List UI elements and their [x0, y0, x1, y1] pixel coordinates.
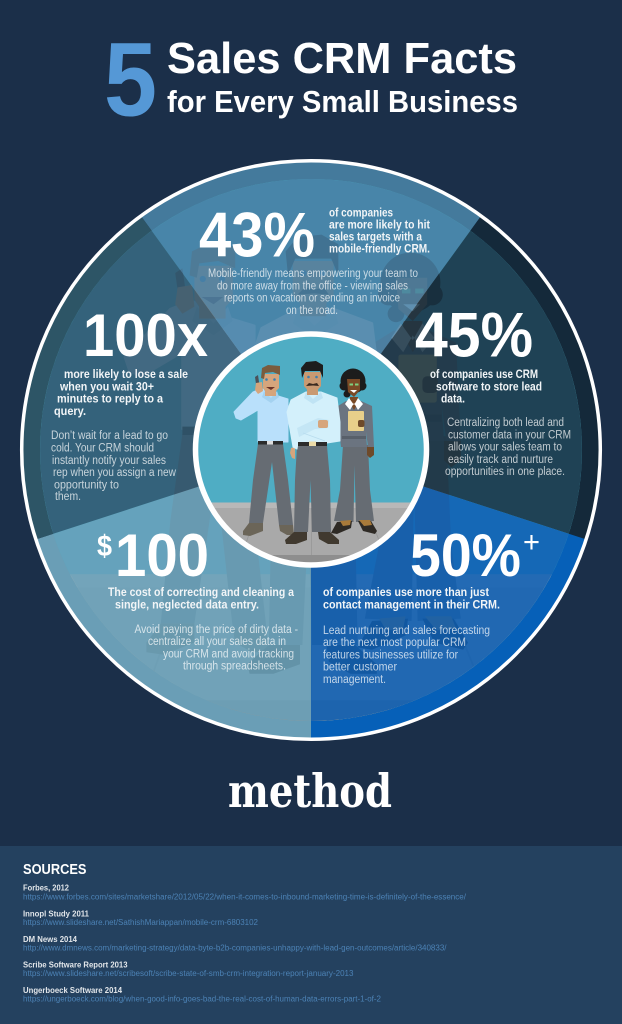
fact: 50%+	[323, 522, 540, 686]
43% headline	[329, 208, 430, 256]
$100 description: your CRM and avoid tracking	[163, 648, 294, 660]
source: DM News: http://www.dmnews.com/marketing-strategy/data-byte-b2b-companies-unhappy-with-lead-gen-outcomes/article/340833/	[23, 944, 447, 952]
43% headline: are more likely to hit	[329, 220, 430, 232]
43% headline: mobile-friendly CRM.	[329, 244, 430, 256]
45% headline: of companies use CRM	[430, 369, 538, 381]
100x description: rep when you assign a new	[53, 467, 177, 479]
$100 headline	[108, 587, 295, 612]
pie chart: five facts	[20, 159, 602, 741]
stat 50%+: 50%	[410, 522, 521, 589]
100x headline: more likely to lose a sale	[64, 369, 188, 381]
outer band sectors	[21, 160, 601, 740]
wedge colour overlays	[40, 179, 582, 721]
45% headline	[430, 369, 542, 406]
source: Ungerboeck: https://ungerboeck.com/blog/when-good-info-goes-bad-the-real-cost-of-human-data-errors-part-1-of-2	[23, 995, 382, 1004]
panel: sources	[0, 846, 622, 1024]
stat $100: $	[97, 530, 112, 563]
big numeral 5: 5	[104, 22, 157, 138]
fact: 100x	[51, 302, 208, 503]
title line 1: Sales CRM Facts	[167, 34, 517, 83]
source: Scribe: Scribe Software Report 2013	[23, 960, 128, 970]
$100 description: centralize all your sales data in	[148, 636, 286, 648]
source: Innopl: Innopl Study 2011	[23, 908, 89, 918]
45% description: customer data in your CRM	[448, 430, 571, 442]
100x description: opportunity to	[54, 480, 119, 492]
45% description: easily track and nurture	[448, 454, 553, 466]
title	[104, 22, 518, 138]
43% headline: of companies	[329, 208, 393, 220]
50%+ description: Lead nurturing and sales forecasting	[323, 625, 490, 637]
logo: method: method	[228, 764, 392, 818]
stat 50%+: +	[523, 526, 540, 559]
100x description: instantly notify your sales	[52, 455, 166, 467]
sources heading: SOURCES	[23, 862, 87, 878]
50%+ headline: contact management in their CRM.	[323, 600, 500, 612]
stat 43%: 43%	[199, 200, 315, 270]
source: Ungerboeck: Ungerboeck Software 2014	[23, 985, 122, 995]
source: DM News: DM News 2014	[23, 934, 77, 944]
100x headline: minutes to reply to a	[57, 394, 164, 406]
45% description: allows your sales team to	[448, 442, 562, 454]
fact: $100	[97, 522, 298, 672]
50%+ description	[323, 625, 490, 686]
$100 description: through spreadsheets.	[183, 660, 286, 672]
$100 description: Avoid paying the price of dirty data -	[134, 624, 298, 636]
50%+ description: management.	[323, 674, 386, 686]
45% headline: software to store lead	[436, 382, 542, 394]
100x headline: when you wait 30+	[59, 382, 154, 394]
43% description: on the road.	[286, 305, 338, 317]
100x description: Don’t wait for a lead to go	[51, 430, 168, 442]
source: Forbes	[23, 883, 467, 902]
43% description: do more away from the office - viewing sales	[217, 280, 408, 292]
43% description: reports on vacation or sending an invoice	[224, 292, 400, 304]
100x description: them.	[55, 491, 81, 503]
50%+ description: are the next most popular CRM	[323, 637, 466, 649]
title line 2: for Every Small Business	[167, 84, 518, 119]
43% headline: sales targets with a	[329, 232, 423, 244]
sources background	[0, 846, 622, 1024]
source: Innopl	[23, 908, 259, 927]
stat $100: 100	[115, 522, 209, 589]
45% description: opportunities in one place.	[445, 466, 565, 478]
stat 45%: 45%	[415, 300, 533, 370]
source: Ungerboeck	[23, 985, 382, 1004]
$100 description	[134, 624, 298, 672]
source: Scribe	[23, 960, 354, 978]
45% description	[445, 417, 571, 478]
50%+ description: better customer	[323, 662, 397, 674]
source: DM News	[23, 934, 447, 952]
fact: 45%	[415, 300, 571, 478]
45% description: Centralizing both lead and	[447, 417, 564, 429]
$100 headline: The cost of correcting and cleaning a	[108, 587, 295, 599]
source: Scribe: https://www.slideshare.net/scribesoft/scribe-state-of-smb-crm-integration-report-january-2013	[23, 969, 354, 978]
white outer ring	[22, 161, 600, 739]
43% description	[208, 268, 418, 317]
100x headline: query.	[54, 406, 86, 418]
100x description	[51, 430, 177, 503]
source: Forbes: Forbes, 2012	[23, 883, 69, 893]
43% description: Mobile-friendly means empowering your team to	[208, 268, 418, 280]
50%+ headline	[323, 587, 500, 612]
stat 100x: 100x	[83, 302, 208, 369]
fact: 43%	[199, 200, 430, 317]
100x headline	[54, 369, 188, 418]
source: Forbes: https://www.forbes.com/sites/marketshare/2012/05/22/when-it-comes-to-inbound-marketing-time-is-definitely-of-the-essence/	[23, 892, 467, 902]
source: Innopl: https://www.slideshare.net/SathishMariappan/mobile-crm-6803102	[23, 918, 259, 927]
45% headline: data.	[441, 394, 465, 406]
50%+ headline: of companies use more than just	[323, 587, 489, 599]
100x description: cold. Your CRM should	[51, 442, 154, 454]
centre illustration: sales team	[192, 331, 430, 568]
$100 headline: single, neglected data entry.	[115, 600, 259, 612]
ghosted enlarged team scene	[40, 179, 582, 721]
50%+ description: features businesses utilize for	[323, 650, 458, 662]
